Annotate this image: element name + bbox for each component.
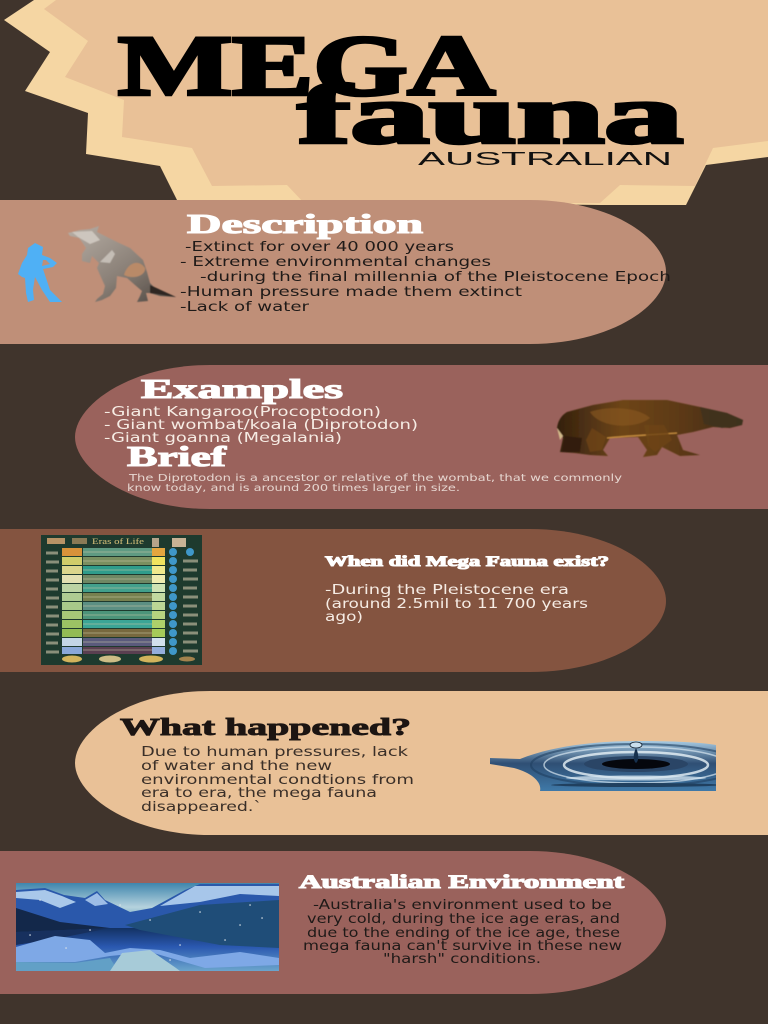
text: australian environment: mega fauna can't survive in these new [303,938,622,954]
text: description list: - Extreme environmental changes [180,254,491,270]
text: when: (around 2.5mil to 11 700 years [325,596,588,612]
title: MEGA [118,18,495,114]
poster title: Eras of Life [92,537,145,546]
text: when: -During the Pleistocene era [325,582,569,598]
text: examples list [104,404,418,446]
heading: australian environment: Australian Environment [299,872,625,893]
panel: australian environment [0,851,666,994]
text: description list [180,239,671,315]
text: what happened: Due to human pressures, lack [141,744,408,760]
heading: examples: Examples [141,374,343,404]
text: brief: know today, and is around 200 times larger in size. [127,483,460,494]
text: description list: -Extinct for over 40 000 years [185,239,454,255]
text: what happened: environmental condtions from [141,772,414,788]
icon: water drop ripples [490,741,741,791]
heading: when: When did Mega Fauna exist? [325,554,609,570]
panel: description [0,200,671,344]
text: what happened: disappeared.` [141,799,262,815]
panel: when [0,529,666,672]
text: examples list: - Giant wombat/koala (Diprotodon) [104,417,418,433]
text: australian environment: -Australia's environment used to be [313,897,612,913]
text: australian environment: "harsh" conditions. [383,951,541,967]
text: examples list: -Giant goanna (Megalania) [104,430,342,446]
chart: eras of life poster [41,535,202,665]
icon: diprotodon [557,400,743,457]
text: brief [127,473,622,494]
text: when: ago) [325,609,363,625]
text: description list: -during the final millennia of the Pleistocene Epoch [200,269,671,285]
heading: brief: Brief [127,441,227,473]
heading: description: Description [187,209,423,239]
text: description list: -Lack of water [180,299,310,315]
heading: what happened: What happened? [120,715,411,741]
panel: examples [75,365,768,509]
text: australian environment: due to the ending of the ice age, these [307,925,620,941]
text: what happened: era to era, the mega fauna [141,785,377,801]
text: examples list: -Giant Kangaroo(Procoptodon) [104,404,381,420]
text: description list: -Human pressure made them extinct [180,284,522,300]
title: AUSTRALIAN [418,149,672,169]
text: when [325,582,588,625]
panel: what happened [75,691,768,835]
title [118,18,683,169]
text: what happened: of water and the new [141,758,332,774]
text: what happened [141,744,414,815]
icon: human silhouette [18,243,62,302]
icon: giant kangaroo [68,226,176,302]
image: mountain lake [16,883,279,971]
text: australian environment [303,897,622,967]
text: brief: The Diprotodon is a ancestor or relative of the wombat, that we commonly [128,473,622,484]
title: fauna [298,68,683,162]
header burst with title [4,0,768,205]
text: australian environment: very cold, during the ice age eras, and [307,911,620,927]
